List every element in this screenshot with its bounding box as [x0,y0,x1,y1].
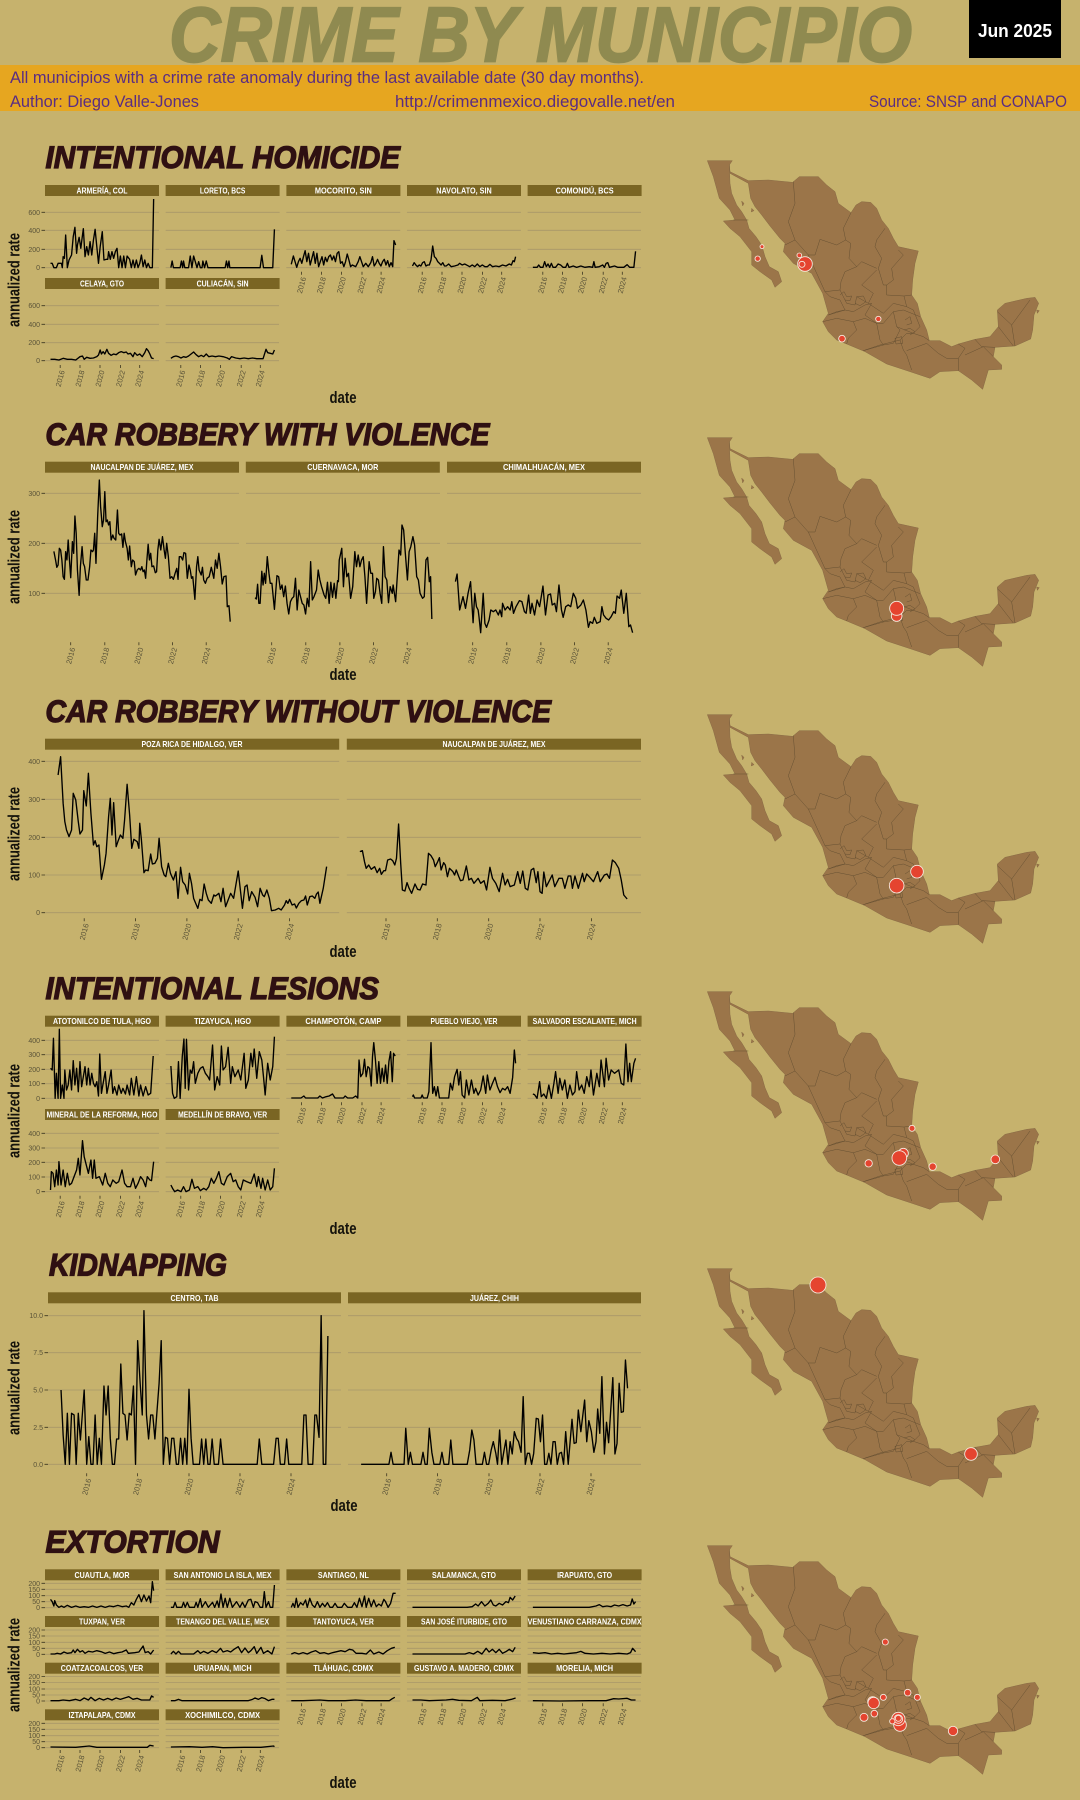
x axis title: date [330,1497,358,1515]
y axis [29,1313,48,1469]
y axis: 600 [28,210,40,217]
y axis: 50 [32,1646,40,1653]
y axis: 0 [36,1652,40,1659]
y axis: 0 [36,1605,40,1612]
panel: Naucalpan: NAUCALPAN DE JUÁREZ, MEX [442,739,546,749]
panel: Tenango del Valle [166,1616,280,1654]
panel: Uruapan [166,1663,280,1701]
subtitle band: Author: Diego Valle-Jones [10,93,199,111]
panel: Uruapan: URUAPAN, MICH [194,1663,252,1673]
panel: Tizayuca [166,1016,280,1098]
map: intentional lesions [707,992,1039,1220]
y axis: 100 [28,1686,40,1694]
heading: car robbery without violence: CAR ROBBERY WITHOUT VIOLENCE [46,693,552,729]
date badge [969,0,1061,58]
y axis: 200 [28,247,40,254]
y axis: 10.0 [29,1313,43,1320]
panel: Centro: CENTRO, TAB [170,1293,218,1303]
section: kidnapping [6,1247,641,1515]
panel: Xochimilco [166,1709,280,1773]
y axis: 50 [32,1692,40,1700]
y axis: 5.0 [33,1388,43,1394]
panel: Cuautla [45,1569,159,1607]
panel: Venustiano Carranza: VENUSTIANO CARRANZA, CDMX [528,1616,642,1626]
date badge: Jun 2025 [978,21,1052,41]
panel: Morelia: MORELIA, MICH [556,1663,613,1673]
panel: Mineral de la Reforma [45,1109,159,1218]
y axis [28,491,45,598]
panel: San José Iturbide: SAN JOSÉ ITURBIDE, GTO [421,1616,507,1626]
panel: Tuxpan [45,1616,159,1654]
panel: Poza Rica: POZA RICA DE HIDALGO, VER [142,739,242,749]
panel: Salamanca [407,1569,521,1607]
y axis: 600 [28,303,40,310]
y axis: 300 [28,1052,40,1059]
panel: Tláhuac [286,1663,400,1726]
panel: Gustavo A. Madero [407,1663,521,1726]
panel: Champotón [286,1015,400,1125]
section: intentional homicide [6,139,642,407]
panel: Gustavo A. Madero: GUSTAVO A. MADERO, CDMX [414,1663,514,1673]
panel: Cuautla: CUAUTLA, MOR [74,1570,130,1580]
y axis: 200 [28,340,40,347]
panel: Comondú: COMONDÚ, BCS [556,184,614,196]
map: car robbery with violence [707,438,1039,666]
y axis: 400 [28,1038,40,1045]
y axis: 150 [28,1634,40,1640]
map: intentional homicide [707,161,1039,389]
y axis title: annualized rate [6,1341,24,1435]
y axis title: annualized rate [6,1618,24,1712]
panel: Celaya: CELAYA, GTO [80,278,124,288]
x axis title: date [330,1220,356,1238]
y axis: 150 [28,1727,40,1734]
x axis title: date [330,943,356,961]
x axis title: date [330,666,356,684]
panel: Tantoyuca: TANTOYUCA, VER [313,1616,374,1626]
panel: Naucalpan [45,462,239,665]
y axis: 0.0 [33,1462,43,1469]
y axis [28,210,45,365]
panel: Juárez: JUÁREZ, CHIH [470,1293,519,1303]
panel: Coatzacoalcos [45,1663,159,1701]
y axis: 2.5 [33,1425,43,1432]
y axis title: annualized rate [6,510,24,604]
panel: Atotonilco de Tula: ATOTONILCO DE TULA, HGO [53,1016,151,1026]
y axis: 100 [28,1174,40,1182]
y axis: 50 [32,1739,40,1746]
y axis: 50 [32,1599,40,1606]
y axis: 0 [36,1698,40,1706]
y axis: 0 [36,265,40,272]
y axis: 200 [28,835,40,842]
panel: Chimalhuacán [447,462,641,665]
y axis title: annualized rate [6,233,24,327]
panel: Atotonilco de Tula [45,1016,159,1098]
panel: Naucalpan: NAUCALPAN DE JUÁREZ, MEX [90,462,194,472]
y axis: 400 [28,322,40,329]
panel: Santiago [286,1569,400,1607]
panel: San Antonio la Isla: SAN ANTONIO LA ISLA, MEX [174,1570,272,1580]
panel: Irapuato: IRAPUATO, GTO [557,1570,612,1580]
y axis: 0 [36,358,40,365]
panel: Salvador Escalante [528,1016,642,1125]
y axis: 400 [28,759,40,766]
panel: Tizayuca: TIZAYUCA, HGO [194,1016,251,1026]
y axis: 7.5 [33,1350,43,1357]
panel: Tantoyuca [286,1616,400,1654]
y axis: 100 [28,591,40,598]
panel: Mocorito: MOCORITO, SIN [315,186,372,196]
section: car robbery without violence [6,693,641,961]
y axis [28,759,45,917]
y axis: 300 [28,1146,40,1152]
section: car robbery with violence [6,416,641,684]
panel: Santiago: SANTIAGO, NL [318,1570,369,1580]
y axis: 100 [28,1733,40,1740]
panel: Venustiano Carranza [528,1616,642,1654]
panel: Pueblo Viejo [407,1016,521,1125]
y axis [28,1581,45,1752]
y axis: 300 [28,491,40,498]
panel: San Antonio la Isla [166,1569,280,1607]
panel: Naucalpan [347,739,641,941]
panel: Culiacán: CULIACÁN, SIN [197,278,249,288]
y axis: 200 [28,1160,40,1167]
panel: Pueblo Viejo: PUEBLO VIEJO, VER [430,1016,498,1026]
heading: extortion: EXTORTION [46,1524,221,1560]
y axis: 150 [28,1587,40,1594]
map: extortion [707,1546,1039,1774]
panel: Irapuato [528,1569,642,1607]
panel: Mocorito [286,185,400,294]
panel: San José Iturbide [407,1616,521,1654]
panel: Tláhuac: TLÁHUAC, CDMX [313,1663,374,1673]
panel: Poza Rica [45,739,339,941]
y axis: 400 [28,1131,40,1138]
x axis title: date [330,389,356,407]
panel: Chimalhuacán: CHIMALHUACÁN, MEX [503,462,585,472]
section: intentional lesions [6,970,642,1238]
y axis: 400 [28,228,40,235]
panel: Navolato: NAVOLATO, SIN [436,186,492,196]
panel: Medellín de Bravo [166,1109,280,1218]
y axis: 200 [28,1674,40,1681]
y axis: 300 [28,797,40,804]
panel: Navolato [407,185,521,294]
y axis: 200 [28,1067,40,1074]
y axis: 200 [28,541,40,548]
map: kidnapping [707,1269,1039,1497]
heading: car robbery with violence: CAR ROBBERY WITH VIOLENCE [46,416,490,452]
x axis title: date [330,1774,356,1792]
y axis: 100 [28,1640,40,1647]
section: extortion [6,1524,642,1792]
panel: Juárez [348,1292,641,1496]
heading: intentional lesions: INTENTIONAL LESIONS [46,970,379,1006]
y axis: 0 [36,1096,40,1103]
panel: Iztapalapa: IZTAPALAPA, CDMX [68,1710,136,1720]
panel: Iztapalapa [45,1709,159,1773]
panel: Celaya [45,278,159,388]
y axis title: annualized rate [6,787,24,881]
y axis: 100 [28,1593,40,1600]
panel: Mineral de la Reforma: MINERAL DE LA REFORMA, HGO [46,1110,158,1120]
y axis: 0 [36,910,40,917]
panel: Comondú [528,184,642,294]
panel: Loreto [166,185,280,268]
map: car robbery without violence [707,715,1039,943]
y axis [28,1038,45,1196]
panel: Armería: ARMERÍA, COL [76,186,128,196]
y axis title: annualized rate [6,1064,24,1158]
y axis: 200 [28,1581,40,1588]
panel: Champotón: CHAMPOTÓN, CAMP [305,1015,382,1026]
subtitle band: All municipios with a crime rate anomaly during the last available date (30 day months). [10,69,644,87]
panel: Cuernavaca [246,462,440,665]
y axis: 100 [28,872,40,880]
subtitle band: http://crimenmexico.diegovalle.net/en [395,93,675,111]
panel: Coatzacoalcos: COATZACOALCOS, VER [61,1663,143,1673]
panel: Xochimilco: XOCHIMILCO, CDMX [185,1710,260,1720]
heading: intentional homicide: INTENTIONAL HOMICIDE [46,139,401,175]
panel: Medellín de Bravo: MEDELLÍN DE BRAVO, VER [178,1110,267,1120]
y axis: 0 [36,1189,40,1196]
subtitle band: Source: SNSP and CONAPO [869,93,1067,111]
subtitle band [0,65,1080,111]
panel: Salvador Escalante: SALVADOR ESCALANTE, MICH [533,1016,637,1026]
heading: kidnapping: KIDNAPPING [49,1247,227,1283]
panel: Tenango del Valle: TENANGO DEL VALLE, MEX [176,1616,269,1626]
panel: Centro [48,1292,341,1496]
panel: Morelia [528,1663,642,1726]
panel: Cuernavaca: CUERNAVACA, MOR [307,462,378,472]
y axis: 0 [36,1745,40,1752]
panel: Culiacán [166,278,280,388]
panel: Armería [45,185,159,268]
y axis: 100 [28,1081,40,1088]
panel: Loreto: LORETO, BCS [200,186,246,196]
y axis: 200 [28,1721,40,1728]
panel: Salamanca: SALAMANCA, GTO [432,1570,496,1580]
panel: Tuxpan: TUXPAN, VER [79,1616,125,1626]
y axis: 150 [28,1680,40,1687]
y axis: 200 [28,1628,40,1634]
